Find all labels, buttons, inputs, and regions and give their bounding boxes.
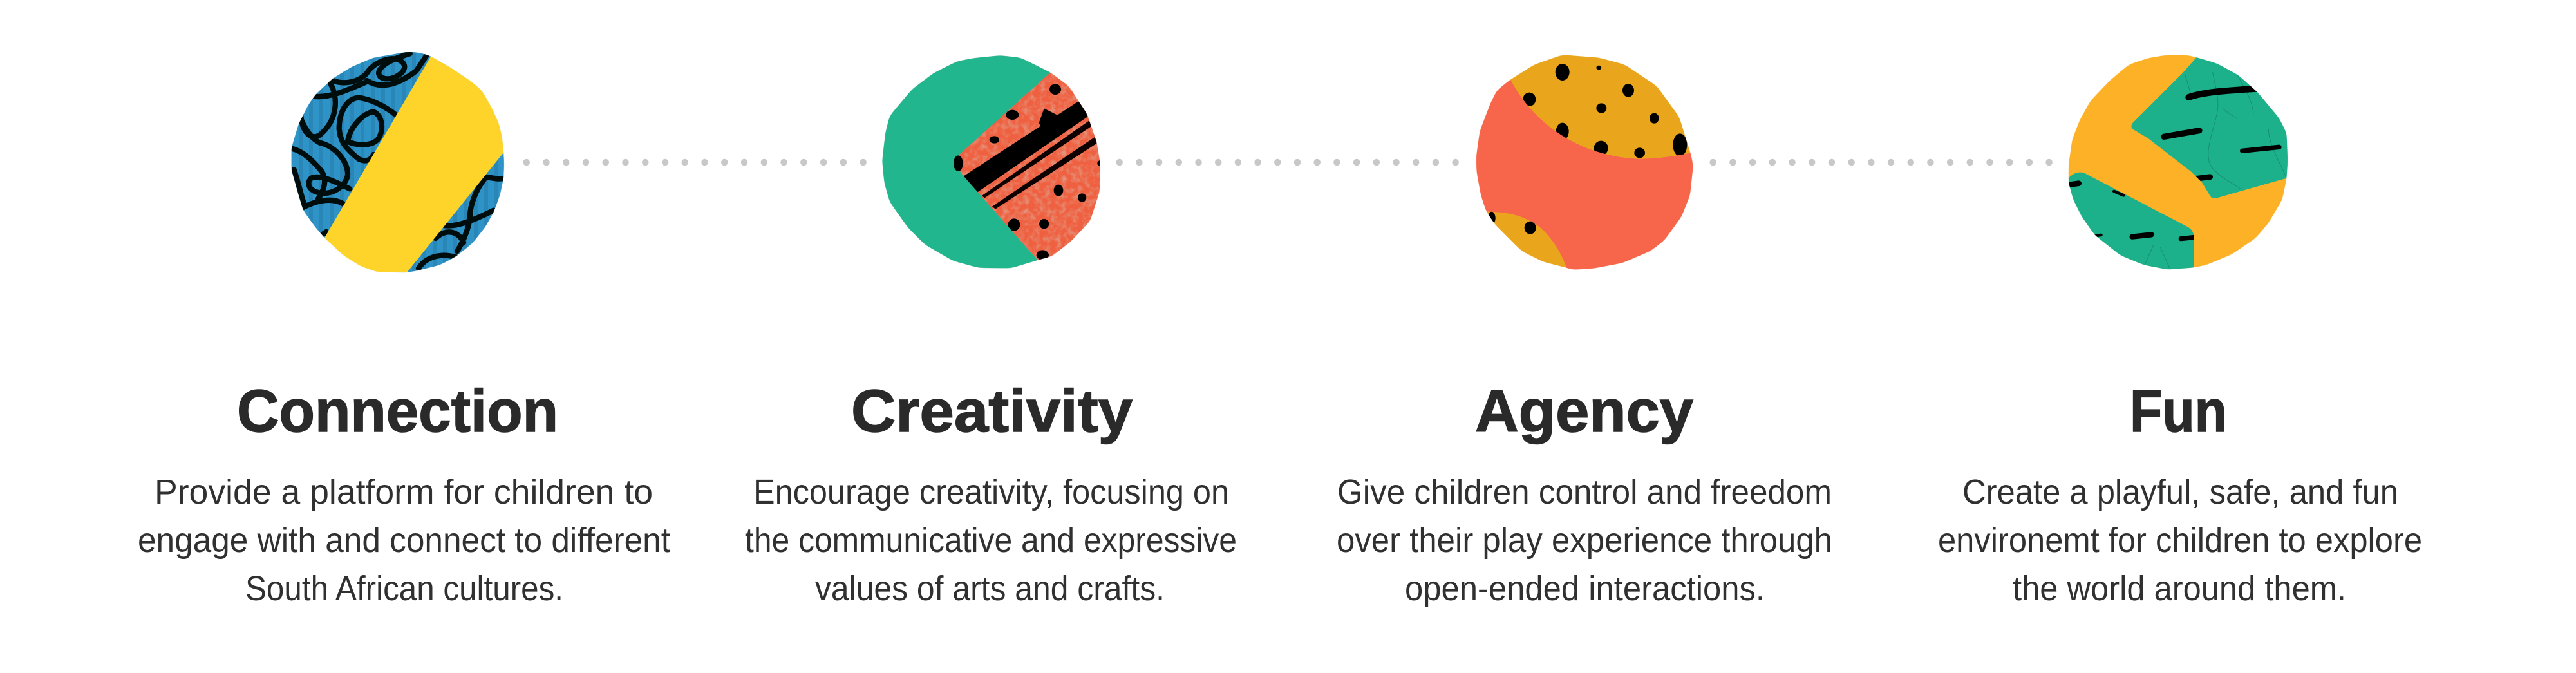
dotted connector: Connection to Creativity	[527, 159, 863, 166]
body text: Creativity: the communicative and expressive	[745, 521, 1237, 560]
body text: Creativity	[745, 473, 1237, 608]
icon: blue scribble circle with yellow band	[291, 52, 505, 273]
heading: Creativity: Creativity	[851, 377, 1133, 444]
body text: Fun: Create a playful, safe, and fun	[1962, 473, 2398, 511]
body text: Agency: open-ended interactions.	[1405, 569, 1765, 608]
body text: Agency: over their play experience through	[1337, 521, 1832, 560]
dotted connector: Agency to Fun	[1713, 159, 2049, 166]
body text: Fun: the world around them.	[2013, 569, 2346, 608]
body text: Fun	[1938, 473, 2422, 608]
panel: Fun	[1938, 52, 2422, 608]
dotted connector: Creativity to Agency	[1120, 159, 1456, 166]
heading: Agency: Agency	[1475, 377, 1693, 444]
heading: Fun: Fun	[2130, 377, 2227, 444]
panel: Agency	[1337, 50, 1832, 608]
body text: Connection	[138, 473, 670, 608]
body text: Creativity: values of arts and crafts.	[815, 569, 1165, 608]
body text: Connection: South African cultures.	[245, 569, 563, 608]
heading: Connection: Connection	[237, 377, 558, 444]
body text: Creativity: Encourage creativity, focusing on	[753, 473, 1229, 511]
body text: Connection: engage with and connect to different	[138, 521, 670, 560]
icon: ochre dotted circle with coral wave	[1470, 50, 1698, 275]
body text: Agency: Give children control and freedom	[1337, 473, 1832, 511]
body text: Agency	[1337, 473, 1832, 608]
body text: Fun: environemt for children to explore	[1938, 521, 2422, 560]
panel: Connection	[138, 45, 670, 608]
icon: green and red-orange circle with black stripes	[882, 55, 1100, 268]
icon: amber and green circle with black dashes	[2062, 52, 2294, 275]
panel: Creativity	[745, 50, 1237, 608]
body text: Connection: Provide a platform for children to	[155, 473, 653, 511]
